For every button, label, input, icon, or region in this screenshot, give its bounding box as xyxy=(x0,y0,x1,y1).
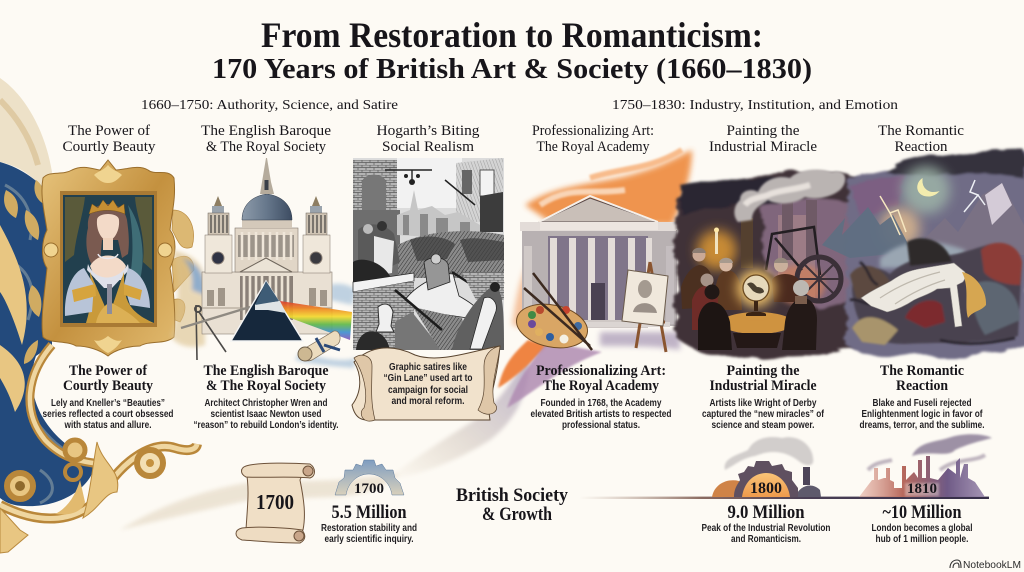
heading: english baroque xyxy=(204,363,329,394)
icon: smoke and gears 1800 xyxy=(712,437,821,497)
column heading: hogarth xyxy=(376,123,480,155)
column heading: industrial miracle xyxy=(709,123,817,155)
text: romantic reaction: Enlightenment logic in favor of xyxy=(862,408,983,420)
stat: 9.0 million: Peak of the Industrial Revolution xyxy=(702,522,830,534)
text: courtly beauty: Lely and Kneller’s “Beauties” xyxy=(51,397,165,409)
heading: British Society & Growth: British Society xyxy=(456,485,568,506)
column heading: romantic reaction: The Romantic xyxy=(878,123,964,139)
scroll callout: Gin Lane: “Gin Lane” used art to xyxy=(384,372,472,384)
scroll callout: Gin Lane: campaign for social xyxy=(388,384,468,396)
glowing orrery xyxy=(737,269,775,316)
portrait figure xyxy=(65,200,154,323)
stat: 5.5 million: Restoration stability and xyxy=(321,522,417,534)
icon: rolled scroll with ribbon xyxy=(298,331,340,361)
column heading: english baroque xyxy=(201,123,331,155)
stat: ~10 million: hub of 1 million people. xyxy=(876,533,969,545)
icon: parchment scroll 1700 xyxy=(236,463,314,543)
stat: 9.0 million xyxy=(702,502,830,545)
scroll callout: Gin Lane: and moral reform. xyxy=(392,395,465,407)
icon: St Paul's Cathedral xyxy=(202,158,332,334)
icon: dividers compass xyxy=(181,305,250,360)
column heading: royal academy: Professionalizing Art: xyxy=(532,123,654,139)
column heading: hogarth: Social Realism xyxy=(382,139,475,155)
foreground figures xyxy=(698,280,817,350)
text: royal academy xyxy=(530,397,672,431)
heading: industrial miracle xyxy=(710,363,817,394)
text: royal academy: professional status. xyxy=(562,419,640,431)
title xyxy=(212,15,812,85)
heading: British Society & Growth xyxy=(456,485,568,525)
illustration: baroque ornament at left edge xyxy=(0,78,197,553)
text: english baroque: “reason” to rebuild London’s identity. xyxy=(194,419,339,431)
illustration: sleeping woman amid nightmare creatures xyxy=(850,238,1022,345)
heading: royal academy: The Royal Academy xyxy=(543,378,659,394)
icon: framed portrait of a court lady xyxy=(42,160,175,356)
illustration: moon, storm and mountains xyxy=(822,166,1024,268)
illustration: Royal Academy building xyxy=(520,196,677,328)
scroll callout: Gin Lane: Graphic satires like xyxy=(389,361,467,373)
era heading: 1750–1830: 1750–1830: Industry, Institution, and Emotion xyxy=(612,98,898,113)
portrait background xyxy=(63,195,154,323)
heading: industrial miracle: Industrial Miracle xyxy=(710,378,817,394)
text: royal academy: elevated British artists to respected xyxy=(530,408,672,420)
icon: industrial city skyline 1810 xyxy=(859,434,992,497)
column heading: courtly beauty: Courtly Beauty xyxy=(62,139,156,155)
icon: glass prism xyxy=(231,281,303,341)
text: courtly beauty xyxy=(42,397,174,431)
left tower xyxy=(205,196,232,273)
column heading: royal academy xyxy=(532,123,654,155)
heading: english baroque: The English Baroque xyxy=(204,363,329,379)
heading: romantic reaction xyxy=(880,363,964,394)
right tower xyxy=(303,196,330,273)
icon: parchment scroll 1700: 1700 xyxy=(256,490,294,514)
text: industrial miracle: captured the “new miracles” of xyxy=(702,408,824,420)
text: english baroque: Architect Christopher Wren and xyxy=(204,397,328,409)
heading: royal academy: Professionalizing Art: xyxy=(536,363,666,379)
text: courtly beauty: with status and allure. xyxy=(64,419,152,431)
flowing brush swoosh connecting eras xyxy=(120,350,530,530)
text: romantic reaction xyxy=(860,397,985,431)
illustration: Gin Lane engraving xyxy=(353,158,504,350)
stat: 5.5 million: 5.5 Million xyxy=(332,502,407,523)
column heading: courtly beauty: The Power of xyxy=(68,123,150,139)
flowing blond hair xyxy=(962,272,986,318)
icon: rainbow spectrum through prism xyxy=(280,301,352,340)
column heading: hogarth: Hogarth’s Biting xyxy=(376,123,480,139)
illustration: dark painterly field of industrial scene xyxy=(674,172,862,358)
column heading: courtly beauty xyxy=(62,123,156,155)
text: english baroque: scientist Isaac Newton used xyxy=(210,408,322,420)
gilded frame xyxy=(42,160,175,356)
era heading: 1660–1750: 1660–1750: Authority, Science, and Satire xyxy=(141,98,398,113)
stat: ~10 million: London becomes a global xyxy=(872,522,973,534)
text: courtly beauty: series reflected a court obsessed xyxy=(42,408,174,420)
heading: royal academy xyxy=(536,363,666,394)
text: industrial miracle: science and steam power. xyxy=(712,419,815,431)
heading: courtly beauty: The Power of xyxy=(69,363,148,379)
title: 170 Years of British Art & Society (1660–1830) xyxy=(212,53,812,85)
text: royal academy: Founded in 1768, the Academy xyxy=(540,397,662,409)
heading: courtly beauty xyxy=(63,363,153,394)
illustration: orange and purple flame brushstrokes xyxy=(498,150,692,408)
illustration: candlelit scene with steam engine xyxy=(681,200,841,350)
icon: easel with bust sketch xyxy=(622,262,668,352)
crescent moon xyxy=(918,179,938,196)
NotebookLM logo: NotebookLM xyxy=(963,560,1021,571)
title: From Restoration to Romanticism: xyxy=(261,15,763,55)
figures round the table xyxy=(681,248,800,330)
heading: romantic reaction: Reaction xyxy=(896,378,949,394)
text: romantic reaction: dreams, terror, and the sublime. xyxy=(860,419,985,431)
text: english baroque xyxy=(194,397,339,431)
heading: romantic reaction: The Romantic xyxy=(880,363,964,379)
column heading: english baroque: The English Baroque xyxy=(201,123,331,139)
illustration: stormy romantic sky xyxy=(846,150,1024,357)
text: industrial miracle xyxy=(702,397,824,431)
text: industrial miracle: Artists like Wright of Derby xyxy=(710,397,817,409)
lightning bolts xyxy=(880,196,906,235)
column heading: romantic reaction xyxy=(878,123,964,155)
stat: 5.5 million xyxy=(321,502,417,545)
icon: industrial city skyline 1810: 1810 xyxy=(907,481,937,497)
column heading: english baroque: & The Royal Society xyxy=(206,139,327,155)
icon: blue gear 1700: 1700 xyxy=(354,481,384,497)
stat: 9.0 million: and Romanticism. xyxy=(731,533,801,545)
heading: english baroque: & The Royal Society xyxy=(206,378,326,394)
stat: 9.0 million: 9.0 Million xyxy=(728,502,805,523)
heading: British Society & Growth: & Growth xyxy=(482,504,552,525)
flywheel xyxy=(797,257,841,301)
illustration: steam cloud from chimney xyxy=(734,170,845,222)
timeline line xyxy=(579,497,989,499)
scroll callout: Gin Lane xyxy=(352,346,500,421)
heading: industrial miracle: Painting the xyxy=(726,363,800,379)
icon: blue gear 1700 xyxy=(335,460,404,497)
white gown figure xyxy=(861,263,965,327)
stat: 5.5 million: early scientific inquiry. xyxy=(324,533,414,545)
dark creatures xyxy=(850,238,1022,345)
heading: courtly beauty: Courtly Beauty xyxy=(63,378,153,394)
stat: ~10 million: ~10 Million xyxy=(882,502,962,523)
text: romantic reaction: Blake and Fuseli rejected xyxy=(872,397,972,409)
icon: smoke and gears 1800: 1800 xyxy=(750,480,782,497)
column heading: industrial miracle: Industrial Miracle xyxy=(709,139,817,155)
illustration: colored wash behind cathedral xyxy=(170,250,356,368)
stat: ~10 million xyxy=(872,502,973,545)
column heading: royal academy: The Royal Academy xyxy=(536,139,650,155)
icon: artist palette and brushes xyxy=(512,273,592,354)
column heading: industrial miracle: Painting the xyxy=(726,123,800,139)
table xyxy=(721,312,793,334)
column heading: romantic reaction: Reaction xyxy=(894,139,948,155)
